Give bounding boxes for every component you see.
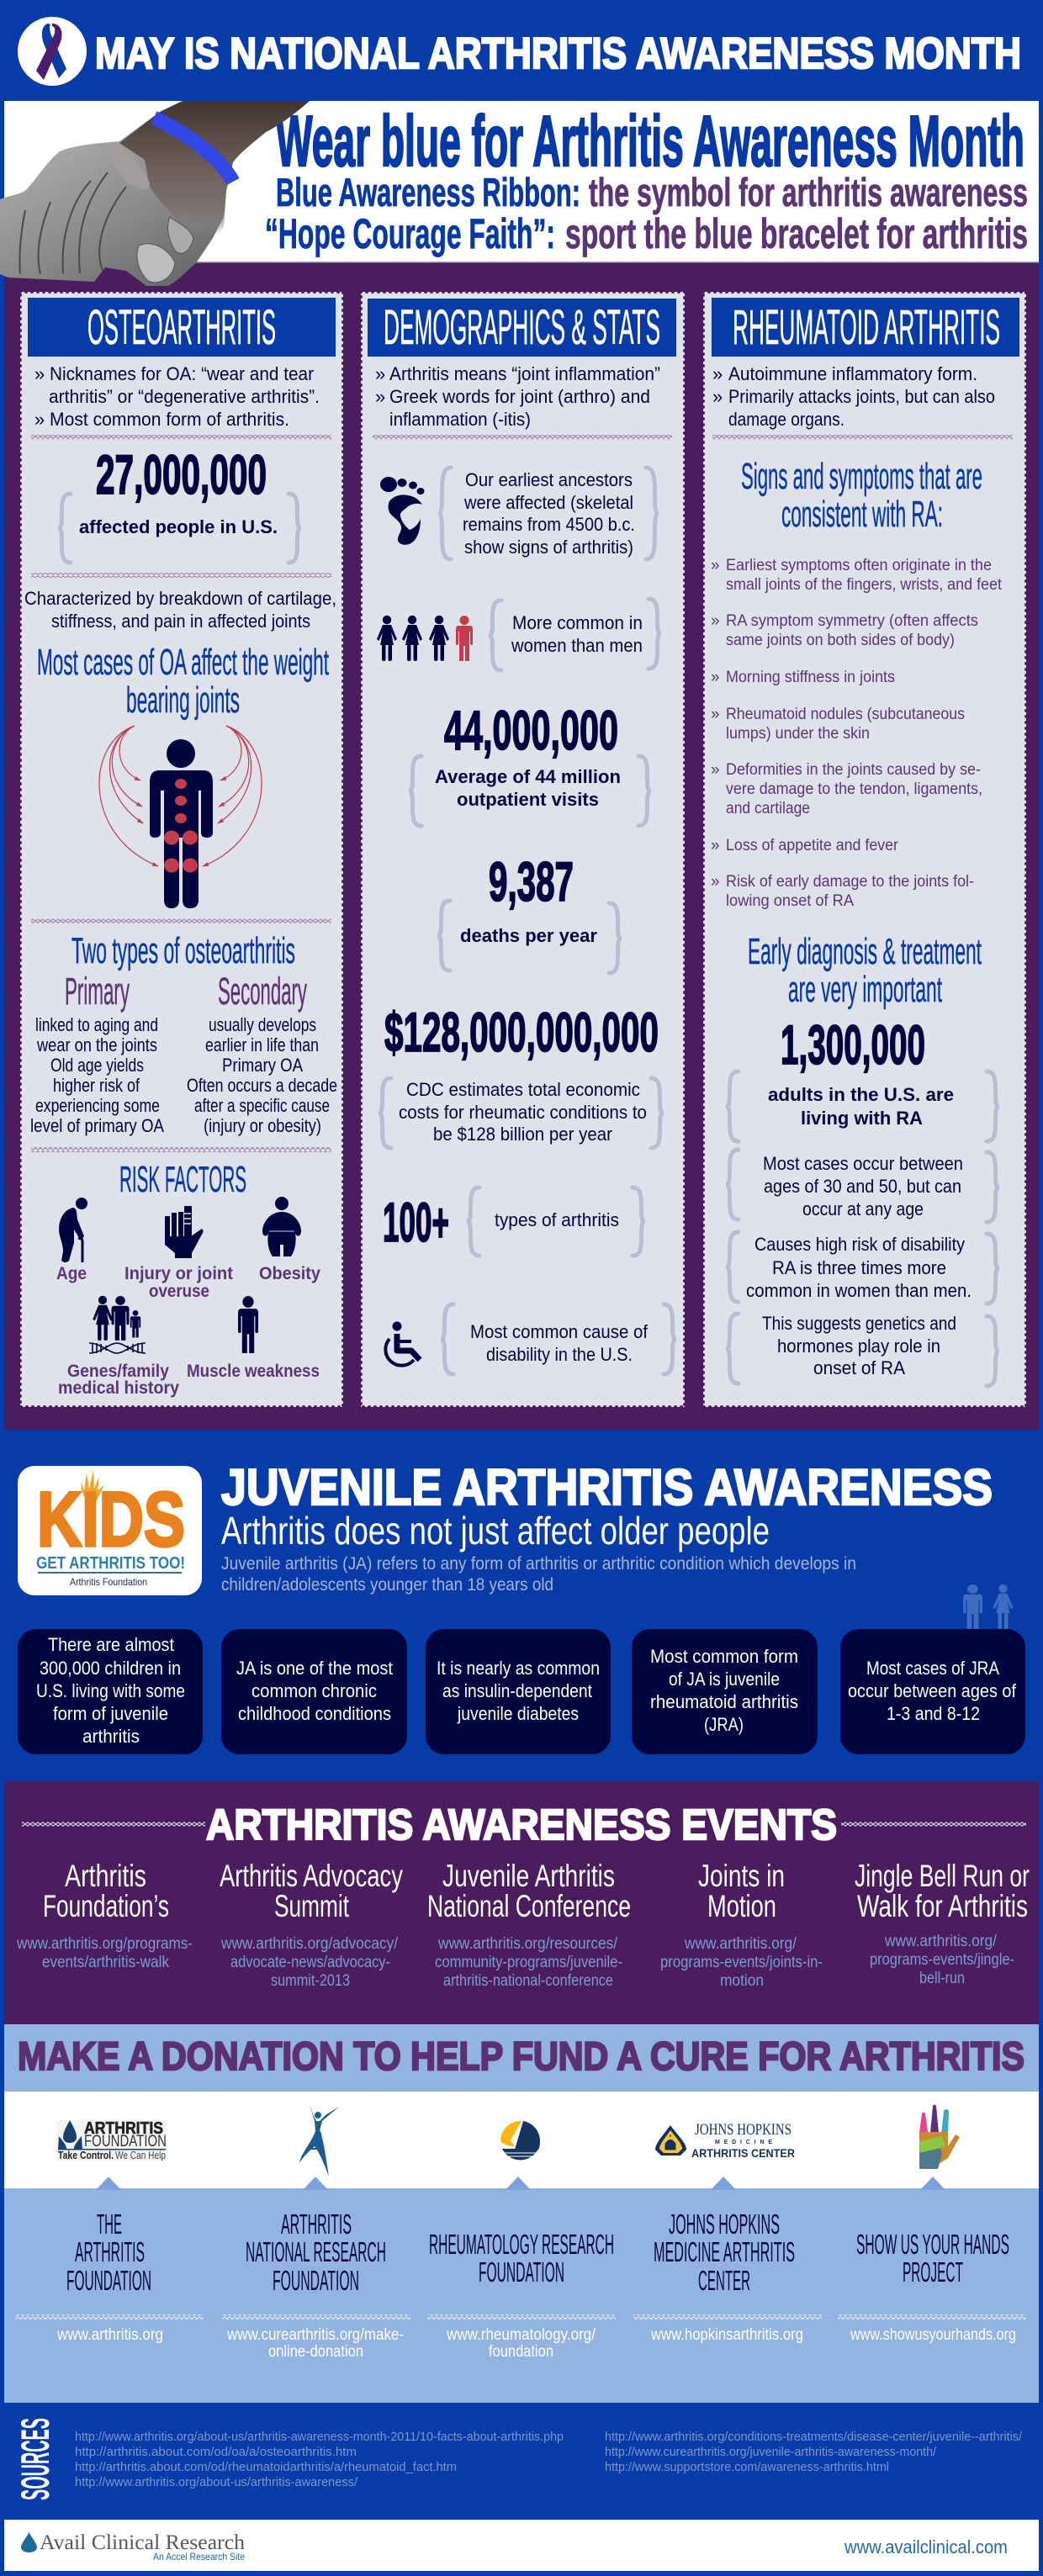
fact: age of onset: Most cases occur between	[763, 1153, 963, 1174]
card: 300,000 children: form of juvenile	[53, 1703, 168, 1724]
website: www.availclinical.com	[844, 2536, 1008, 2557]
event: joints in motion: Motion	[707, 1889, 776, 1923]
diagram: body with joints and arrows	[99, 726, 262, 908]
event: jingle bell run	[855, 1859, 1030, 1987]
stat: disability with wheelchair icon: disability in the U.S.	[486, 1344, 633, 1365]
stat: 1,300,000: adults in the U.S. are	[768, 1084, 954, 1105]
risk: genes family history: medical history	[58, 1378, 179, 1398]
fact: age of onset: occur at any age	[802, 1198, 924, 1219]
risk: age	[56, 1198, 87, 1283]
column: primary: Primary	[65, 970, 130, 1013]
stat: $128,000,000,000: $128,000,000,000	[384, 1001, 659, 1063]
pointers	[96, 2177, 945, 2190]
source links left: http://arthritis.about.com/od/oa/a/osteoarthritis.htm	[75, 2445, 357, 2459]
stat: 44,000,000: outpatient visits	[457, 789, 599, 810]
purple background section	[4, 262, 1039, 1430]
heading: signs and symptoms	[741, 456, 982, 535]
event: advocacy summit: advocate-news/advocacy-	[230, 1954, 390, 1971]
org: show us your hands: PROJECT	[903, 2256, 963, 2288]
event: juvenile conference: National Conference	[427, 1889, 631, 1923]
org: the arthritis foundation: THE	[97, 2208, 122, 2240]
column: secondary: usually develops	[209, 1014, 316, 1035]
fact: disability risk: Causes high risk of disability	[754, 1234, 965, 1255]
heading: early diagnosis	[748, 931, 982, 1010]
logo: kids get arthritis too: KIDS	[37, 1477, 185, 1563]
stat: ancestors with footprint icon: were affected (skeletal	[463, 492, 633, 513]
logo: arthritis foundation	[56, 2119, 167, 2161]
description	[221, 1554, 856, 1595]
risk: muscle weakness: Muscle weakness	[187, 1362, 320, 1381]
symptom list: same joints on both sides of body)	[726, 632, 955, 649]
stat: 1,300,000: living with RA	[801, 1108, 923, 1129]
event: joints in motion	[660, 1859, 823, 1990]
org: rheumatology research foundation: www.rheumatology.org/	[446, 2326, 596, 2344]
bullet list: »	[375, 363, 385, 384]
card: chronic conditions: childhood conditions	[238, 1703, 391, 1724]
event: advocacy summit: summit-2013	[271, 1972, 350, 1990]
event: jingle bell run: bell-run	[919, 1970, 965, 1987]
stat: 44,000,000	[409, 699, 651, 826]
event: advocacy summit: www.arthritis.org/advocacy/	[220, 1935, 399, 1953]
risk: age: Age	[56, 1264, 87, 1283]
heading: two types: Two types of osteoarthritis	[71, 930, 295, 971]
text: DEMOGRAPHICS & STATS	[384, 300, 660, 355]
bullet list: Most common form of arthritis.	[50, 409, 289, 430]
symptom list: »	[711, 557, 720, 574]
card: 300,000 children	[18, 1629, 203, 1754]
stat: 9,387: deaths per year	[460, 925, 597, 946]
column: secondary: (injury or obesity)	[204, 1115, 321, 1136]
column: primary: Old age yields	[50, 1055, 144, 1076]
fact: age of onset	[726, 1150, 999, 1222]
event: joints in motion: Joints in	[698, 1859, 785, 1893]
org: johns hopkins: www.hopkinsarthritis.org	[650, 2326, 803, 2344]
event: jingle bell run: programs-events/jingle-	[870, 1951, 1014, 1969]
stat: ancestors with footprint icon: remains from 4500 b.c.	[463, 514, 635, 535]
risk: genes family history	[58, 1296, 179, 1398]
org: rheumatology research foundation: foundation	[489, 2343, 553, 2361]
column: secondary: Secondary	[218, 970, 307, 1013]
org: the arthritis foundation: FOUNDATION	[66, 2265, 151, 2296]
bullet list: »	[34, 363, 45, 384]
column: primary: wear on the joints	[36, 1034, 157, 1055]
column: secondary	[187, 970, 337, 1136]
card: chronic conditions: common chronic	[251, 1680, 377, 1701]
bullet list	[712, 363, 995, 430]
stat: $128,000,000,000: be $128 billion per year	[433, 1124, 612, 1145]
brand name: An Accel Research Site	[153, 2551, 245, 2563]
source links left	[75, 2430, 564, 2489]
risk: injury or joint overuse: overuse	[149, 1282, 209, 1301]
symptom list: »	[711, 837, 720, 854]
org: arthritis national research foundation: online-donation	[268, 2343, 363, 2361]
logo: johns hopkins arthritis center: JOHNS HOPKINS	[695, 2121, 792, 2139]
org: arthritis national research foundation: www.curearthritis.org/make-	[226, 2326, 404, 2344]
description: children/adolescents younger than 18 years old	[221, 1575, 553, 1595]
column: primary	[30, 970, 164, 1136]
column: secondary: earlier in life than	[205, 1034, 319, 1055]
org: the arthritis foundation: www.arthritis.org	[56, 2326, 163, 2344]
org: arthritis national research foundation	[222, 2208, 410, 2361]
stat: 44,000,000: Average of 44 million	[435, 766, 621, 787]
risk: obesity	[259, 1197, 320, 1283]
org: the arthritis foundation: ARTHRITIS	[75, 2236, 145, 2267]
stat: 9,387: 9,387	[489, 850, 574, 912]
card: JRA form: (JRA)	[704, 1714, 744, 1735]
event: arthritis foundation: events/arthritis-walk	[42, 1954, 169, 1971]
stat: $128,000,000,000: CDC estimates total economic	[406, 1079, 640, 1100]
heading: weight bearing joints: bearing joints	[126, 680, 240, 721]
symptom list: Earliest symptoms often originate in the	[726, 557, 992, 574]
stat: 9,387	[437, 850, 622, 973]
symptom list: RA symptom symmetry (often affects	[726, 612, 978, 630]
org: rheumatology research foundation	[427, 2229, 616, 2361]
stat: 1,300,000	[726, 1013, 999, 1141]
section: donation	[4, 2024, 1039, 2403]
card: diabetes comparison: juvenile diabetes	[457, 1703, 579, 1724]
stat: 27,000,000: affected people in U.S.	[79, 516, 278, 537]
card: JRA form	[632, 1629, 818, 1754]
event: jingle bell run: www.arthritis.org/	[884, 1933, 998, 1950]
icon: awareness ribbon	[18, 17, 87, 86]
symptom list	[711, 557, 1003, 910]
event: juvenile conference: arthritis-national-conference	[443, 1972, 613, 1990]
fact: disability risk: RA is three times more	[772, 1257, 946, 1278]
bullet list: arthritis” or “degenerative arthritis”.	[49, 386, 320, 407]
card: diabetes comparison: It is nearly as common	[437, 1658, 600, 1679]
stat: ancestors with footprint icon: Our earliest ancestors	[465, 469, 633, 490]
column: primary: higher risk of	[53, 1075, 140, 1096]
card: chronic conditions	[221, 1629, 407, 1754]
source links right	[605, 2430, 1023, 2474]
org: the arthritis foundation	[15, 2208, 204, 2344]
bullet list: Autoimmune inflammatory form.	[728, 363, 977, 384]
symptom list: »	[711, 669, 720, 686]
event: joints in motion: motion	[720, 1972, 764, 1990]
source links right: http://www.curearthritis.org/juvenile-arthritis-awareness-month/	[605, 2445, 937, 2459]
text: characterized: Characterized by breakdown of cartilage,	[24, 588, 336, 609]
logo drop	[21, 2532, 37, 2552]
stat: more common in women: More common in	[512, 612, 643, 633]
card: diabetes comparison	[426, 1629, 611, 1754]
risk: injury or joint overuse	[124, 1206, 233, 1301]
header banner	[18, 17, 1021, 86]
card: 300,000 children: U.S. living with some	[36, 1680, 185, 1701]
stat: more common in women	[377, 599, 661, 670]
bullet list: »	[712, 386, 723, 407]
symptom list: vere damage to the tendon, ligaments,	[726, 780, 982, 798]
section: sources	[13, 2418, 1023, 2500]
logo: johns hopkins arthritis center	[655, 2121, 795, 2160]
symptom list: lumps) under the skin	[726, 725, 870, 743]
column: primary: experiencing some	[35, 1095, 160, 1116]
org: johns hopkins: CENTER	[698, 2265, 750, 2296]
symptom list: Risk of early damage to the joints fol-	[726, 873, 974, 891]
icon: wheelchair	[385, 1322, 420, 1366]
source links left: http://arthritis.about.com/od/rheumatoidarthritis/a/rheumatoid_fact.htm	[75, 2460, 457, 2474]
column: secondary: after a specific cause	[194, 1095, 330, 1116]
stat: 100+: types of arthritis	[495, 1209, 619, 1230]
event: advocacy summit	[220, 1859, 403, 1990]
logo: arthritis national research foundation	[299, 2103, 339, 2177]
bullet list: Primarily attacks joints, but can also	[728, 386, 995, 407]
bullet list: »	[375, 386, 385, 407]
org: arthritis national research foundation: FOUNDATION	[273, 2265, 359, 2296]
logo: johns hopkins arthritis center: ARTHRITIS CENTER	[691, 2146, 795, 2160]
fact: genetics: onset of RA	[813, 1357, 905, 1378]
logo: kids get arthritis too: GET ARTHRITIS TOO!	[36, 1554, 185, 1573]
panel: osteoarthritis	[20, 292, 343, 1407]
fact: genetics	[726, 1313, 999, 1386]
stat: 1,300,000: 1,300,000	[781, 1013, 925, 1076]
card: JRA form: Most common form	[650, 1646, 798, 1667]
text: blue awareness ribbon	[276, 170, 1028, 214]
card: chronic conditions: JA is one of the most	[236, 1658, 393, 1679]
image: holding hands with blue bracelet	[0, 101, 310, 286]
symptom list: »	[711, 761, 720, 779]
org: show us your hands: www.showusyourhands.org	[850, 2326, 1016, 2344]
text: SOURCES	[13, 2418, 57, 2500]
bullet list: Nicknames for OA: “wear and tear	[50, 363, 314, 384]
bullet list: inflammation (-itis)	[389, 409, 531, 430]
logo: show us your hands	[919, 2104, 960, 2169]
panel: wear blue	[4, 101, 1039, 262]
fact: genetics: This suggests genetics and	[762, 1313, 956, 1334]
symptom list: »	[711, 706, 720, 723]
event: advocacy summit: Summit	[274, 1889, 350, 1923]
bullet list: Greek words for joint (arthro) and	[389, 386, 650, 407]
risk: obesity: Obesity	[259, 1264, 320, 1283]
heading box	[28, 298, 336, 357]
column: primary: linked to aging and	[35, 1014, 158, 1035]
event: arthritis foundation	[16, 1859, 193, 1971]
event: joints in motion: www.arthritis.org/	[684, 1935, 797, 1953]
card: 300,000 children: arthritis	[82, 1726, 140, 1747]
text: characterized	[24, 588, 336, 632]
stat: 27,000,000	[58, 443, 301, 563]
section: arthritis awareness events	[4, 1781, 1039, 2024]
fact: disability risk: common in women than men.	[746, 1280, 972, 1301]
event: juvenile conference: www.arthritis.org/resources/	[437, 1935, 618, 1953]
fact: disability risk	[726, 1232, 999, 1304]
card: 300,000 children: There are almost	[48, 1634, 174, 1655]
symptom list: »	[711, 612, 720, 630]
org: johns hopkins: MEDICINE ARTHRITIS	[654, 2236, 795, 2267]
symptom list: Rheumatoid nodules (subcutaneous	[726, 706, 965, 723]
org: arthritis national research foundation: ARTHRITIS	[281, 2208, 352, 2240]
fact: genetics: hormones play role in	[777, 1336, 940, 1357]
symptom list: lowing onset of RA	[726, 892, 854, 910]
bullet list: »	[712, 363, 723, 384]
icon: footprint	[380, 477, 424, 545]
column: secondary: Primary OA	[222, 1055, 303, 1076]
fact: age of onset: ages of 30 and 50, but can	[764, 1176, 961, 1197]
stat: more common in women: women than men	[511, 635, 643, 656]
source links right: http://www.supportstore.com/awareness-arthritis.html	[605, 2460, 889, 2474]
org: show us your hands	[838, 2229, 1026, 2344]
card: ages: occur between ages of	[848, 1680, 1017, 1701]
bracelet	[154, 118, 233, 182]
symptom list: »	[711, 873, 720, 891]
risk: injury or joint overuse: Injury or joint	[124, 1264, 233, 1283]
heading: weight bearing joints	[37, 642, 329, 721]
heading: weight bearing joints: Most cases of OA affect the weight	[37, 642, 329, 683]
column: primary: level of primary OA	[30, 1115, 164, 1136]
event: arthritis foundation: www.arthritis.org/programs-	[16, 1935, 193, 1953]
heading box: OSTEOARTHRITIS	[87, 300, 276, 355]
logo: arthritis foundation: We Can Help	[115, 2149, 166, 2161]
card: 300,000 children: 300,000 children in	[40, 1658, 181, 1679]
event: juvenile conference: Juvenile Arthritis	[442, 1859, 615, 1893]
org: johns hopkins	[633, 2208, 822, 2344]
logo: arthritis foundation: Take Control.	[58, 2149, 114, 2161]
logo: kids get arthritis too	[18, 1466, 202, 1595]
stat: $128,000,000,000	[379, 1001, 664, 1148]
bullet list	[375, 363, 660, 430]
icon: children	[963, 1584, 1013, 1629]
event: advocacy summit: Arthritis Advocacy	[220, 1859, 403, 1893]
logo: rheumatology research foundation	[500, 2121, 540, 2161]
logo: johns hopkins arthritis center: MEDICINE	[715, 2140, 772, 2145]
source links left: http://www.arthritis.org/about-us/arthritis-awareness/	[75, 2475, 358, 2489]
text: hope courage faith	[265, 210, 1028, 257]
symptom list: Morning stiffness in joints	[726, 669, 895, 686]
org: rheumatology research foundation: FOUNDATION	[479, 2256, 564, 2288]
stat: 100+	[383, 1187, 645, 1256]
text: blue awareness ribbon: Blue Awareness Ribbon:	[276, 170, 580, 214]
card: ages: Most cases of JRA	[866, 1658, 999, 1679]
stat: disability with wheelchair icon	[385, 1304, 676, 1374]
bullet list	[34, 363, 320, 430]
bullet list: Arthritis means “joint inflammation”	[389, 363, 660, 384]
card: ages: 1-3 and 8-12	[887, 1703, 980, 1724]
section: donation: RHEUMATOLOGY RESEARCH	[429, 2229, 614, 2260]
risk: muscle weakness	[187, 1296, 320, 1381]
symptom list: Deformities in the joints caused by se-	[726, 761, 981, 779]
text: hope courage faith: “Hope Courage Faith”:	[265, 210, 555, 257]
stat: 27,000,000: 27,000,000	[96, 443, 267, 505]
event: joints in motion: programs-events/joints-in-	[660, 1954, 823, 1971]
stat: ancestors with footprint icon: show signs of arthritis)	[464, 537, 633, 558]
panel: osteoarthritis: RISK FACTORS	[119, 1159, 246, 1200]
stat: ancestors with footprint icon	[380, 468, 659, 559]
event: juvenile conference	[427, 1859, 631, 1990]
card: diabetes comparison: as insulin-dependent	[442, 1680, 592, 1701]
symptom list: and cartilage	[726, 800, 810, 817]
event: juvenile conference: community-programs/juvenile-	[435, 1954, 622, 1971]
text: characterized: stiffness, and pain in affected joints	[51, 611, 310, 632]
subtitle: Arthritis does not just affect older people	[221, 1509, 770, 1552]
heading box	[368, 299, 676, 357]
event: arthritis foundation: Arthritis	[65, 1859, 146, 1893]
event: arthritis foundation: Foundation’s	[43, 1889, 169, 1923]
stat: 44,000,000: 44,000,000	[444, 699, 618, 761]
risk: genes family history: Genes/family	[67, 1362, 169, 1381]
bullet list: damage organs.	[728, 409, 844, 430]
card: JRA form: of JA is juvenile	[669, 1669, 780, 1690]
section: juvenile arthritis awareness	[18, 1459, 1025, 1754]
symptom list: Loss of appetite and fever	[726, 837, 899, 854]
logo: arthritis foundation: FOUNDATION	[84, 2133, 167, 2150]
stat: $128,000,000,000: costs for rheumatic conditions to	[399, 1102, 647, 1123]
symptom list: small joints of the fingers, wrists, and feet	[726, 576, 1003, 594]
source links left: http://www.arthritis.org/about-us/arthritis-awareness-month-2011/10-facts-about-arthritis.php	[75, 2430, 564, 2444]
title: ARTHRITIS AWARENESS EVENTS	[206, 1801, 837, 1849]
source links right: http://www.arthritis.org/conditions-treatments/disease-center/juvenile--arthritis/	[605, 2430, 1023, 2444]
panel: demographics and stats	[361, 292, 685, 1407]
logo: kids get arthritis too: Arthritis Foundation	[70, 1576, 147, 1588]
card: JRA form: rheumatoid arthritis	[650, 1691, 798, 1712]
description: Juvenile arthritis (JA) refers to any form of arthritis or arthritic condition which develops in	[221, 1554, 856, 1574]
org: johns hopkins: JOHNS HOPKINS	[669, 2208, 780, 2240]
column: secondary: Often occurs a decade	[187, 1075, 337, 1096]
footer: avail clinical research	[4, 2520, 1039, 2571]
bullet list: »	[34, 409, 45, 430]
stat: 100+: 100+	[383, 1191, 449, 1253]
card: ages	[840, 1629, 1025, 1754]
brand name: Avail Clinical Research	[40, 2531, 246, 2554]
logo: arthritis foundation: ARTHRITIS	[84, 2119, 163, 2138]
panel: rheumatoid arthritis	[703, 292, 1026, 1407]
org: arthritis national research foundation: NATIONAL RESEARCH	[246, 2236, 386, 2267]
stat: disability with wheelchair icon: Most common cause of	[470, 1321, 649, 1342]
